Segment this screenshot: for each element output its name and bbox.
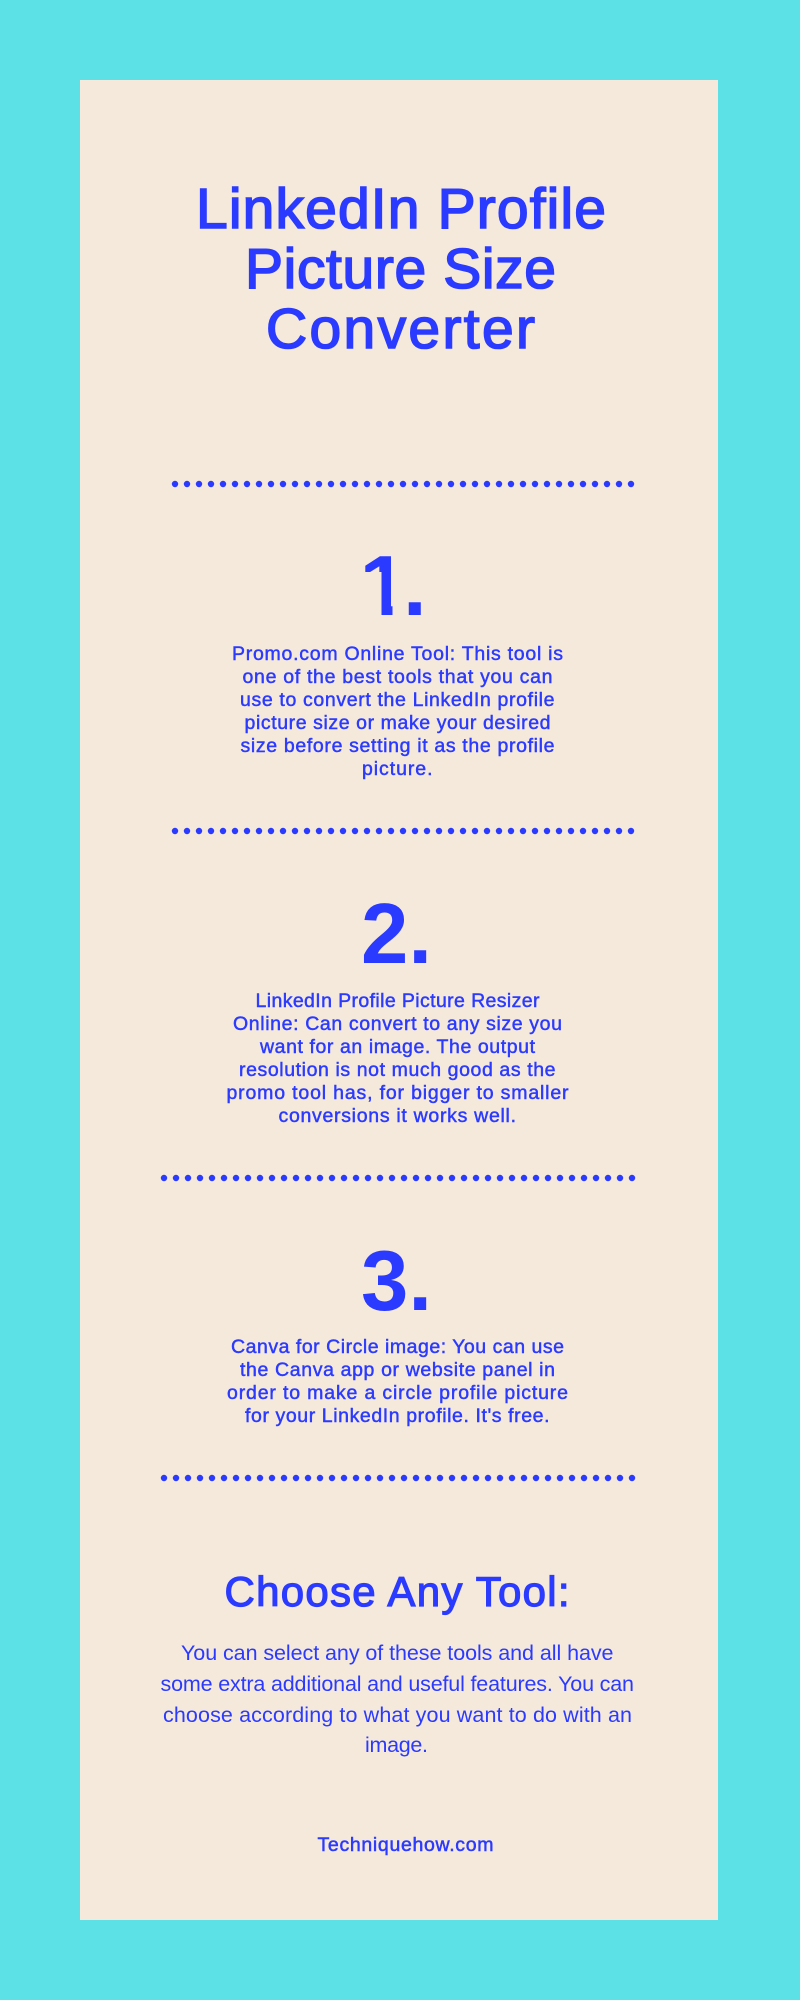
closing paragraph: image. — [365, 1733, 428, 1757]
step 3 text: order to make a circle profile picture — [227, 1382, 568, 1404]
step 1 — [232, 539, 563, 780]
step 2 number: 2. — [361, 887, 432, 982]
title: LinkedIn Profile — [196, 177, 606, 241]
step 1 text: one of the best tools that you can — [242, 666, 552, 688]
title — [196, 177, 606, 361]
step 1 text: Promo.com Online Tool: This tool is — [232, 643, 563, 665]
closing paragraph: You can select any of these tools and all have — [181, 1641, 614, 1665]
closing paragraph — [160, 1641, 634, 1757]
step 1 number: 1. — [360, 539, 427, 634]
step 2 text — [226, 990, 569, 1127]
heading: choose any tool: Choose Any Tool: — [224, 1568, 570, 1615]
step 2 text: resolution is not much good as the — [239, 1059, 556, 1081]
panel: cream card — [80, 80, 718, 1920]
step 2 text: want for an image. The output — [259, 1036, 536, 1058]
step 2 text: LinkedIn Profile Picture Resizer — [256, 990, 540, 1012]
step 1 text: use to convert the LinkedIn profile — [240, 689, 554, 711]
step 2 text: Online: Can convert to any size you — [233, 1013, 562, 1035]
step 1 text — [232, 643, 563, 780]
step 3 text — [227, 1336, 568, 1427]
step 3 number: 3. — [361, 1234, 432, 1329]
step 2 — [226, 887, 569, 1127]
step 3 text: for your LinkedIn profile. It's free. — [245, 1405, 550, 1427]
step 1 text: size before setting it as the profile — [240, 735, 554, 757]
step 2 text: promo tool has, for bigger to smaller — [226, 1082, 569, 1104]
step 3 — [227, 1234, 568, 1427]
footer: source credit: Techniquehow.com — [318, 1834, 494, 1856]
title: Converter — [266, 297, 535, 361]
closing paragraph: choose according to what you want to do with an — [163, 1703, 632, 1727]
step 3 text: Canva for Circle image: You can use — [231, 1336, 564, 1358]
step 1 text: picture size or make your desired — [244, 712, 550, 734]
step 3 text: the Canva app or website panel in — [240, 1359, 555, 1381]
closing paragraph: some extra additional and useful features. You can — [160, 1672, 634, 1696]
step 2 text: conversions it works well. — [278, 1105, 516, 1127]
step 1 text: picture. — [362, 758, 432, 780]
title: Picture Size — [245, 237, 556, 301]
